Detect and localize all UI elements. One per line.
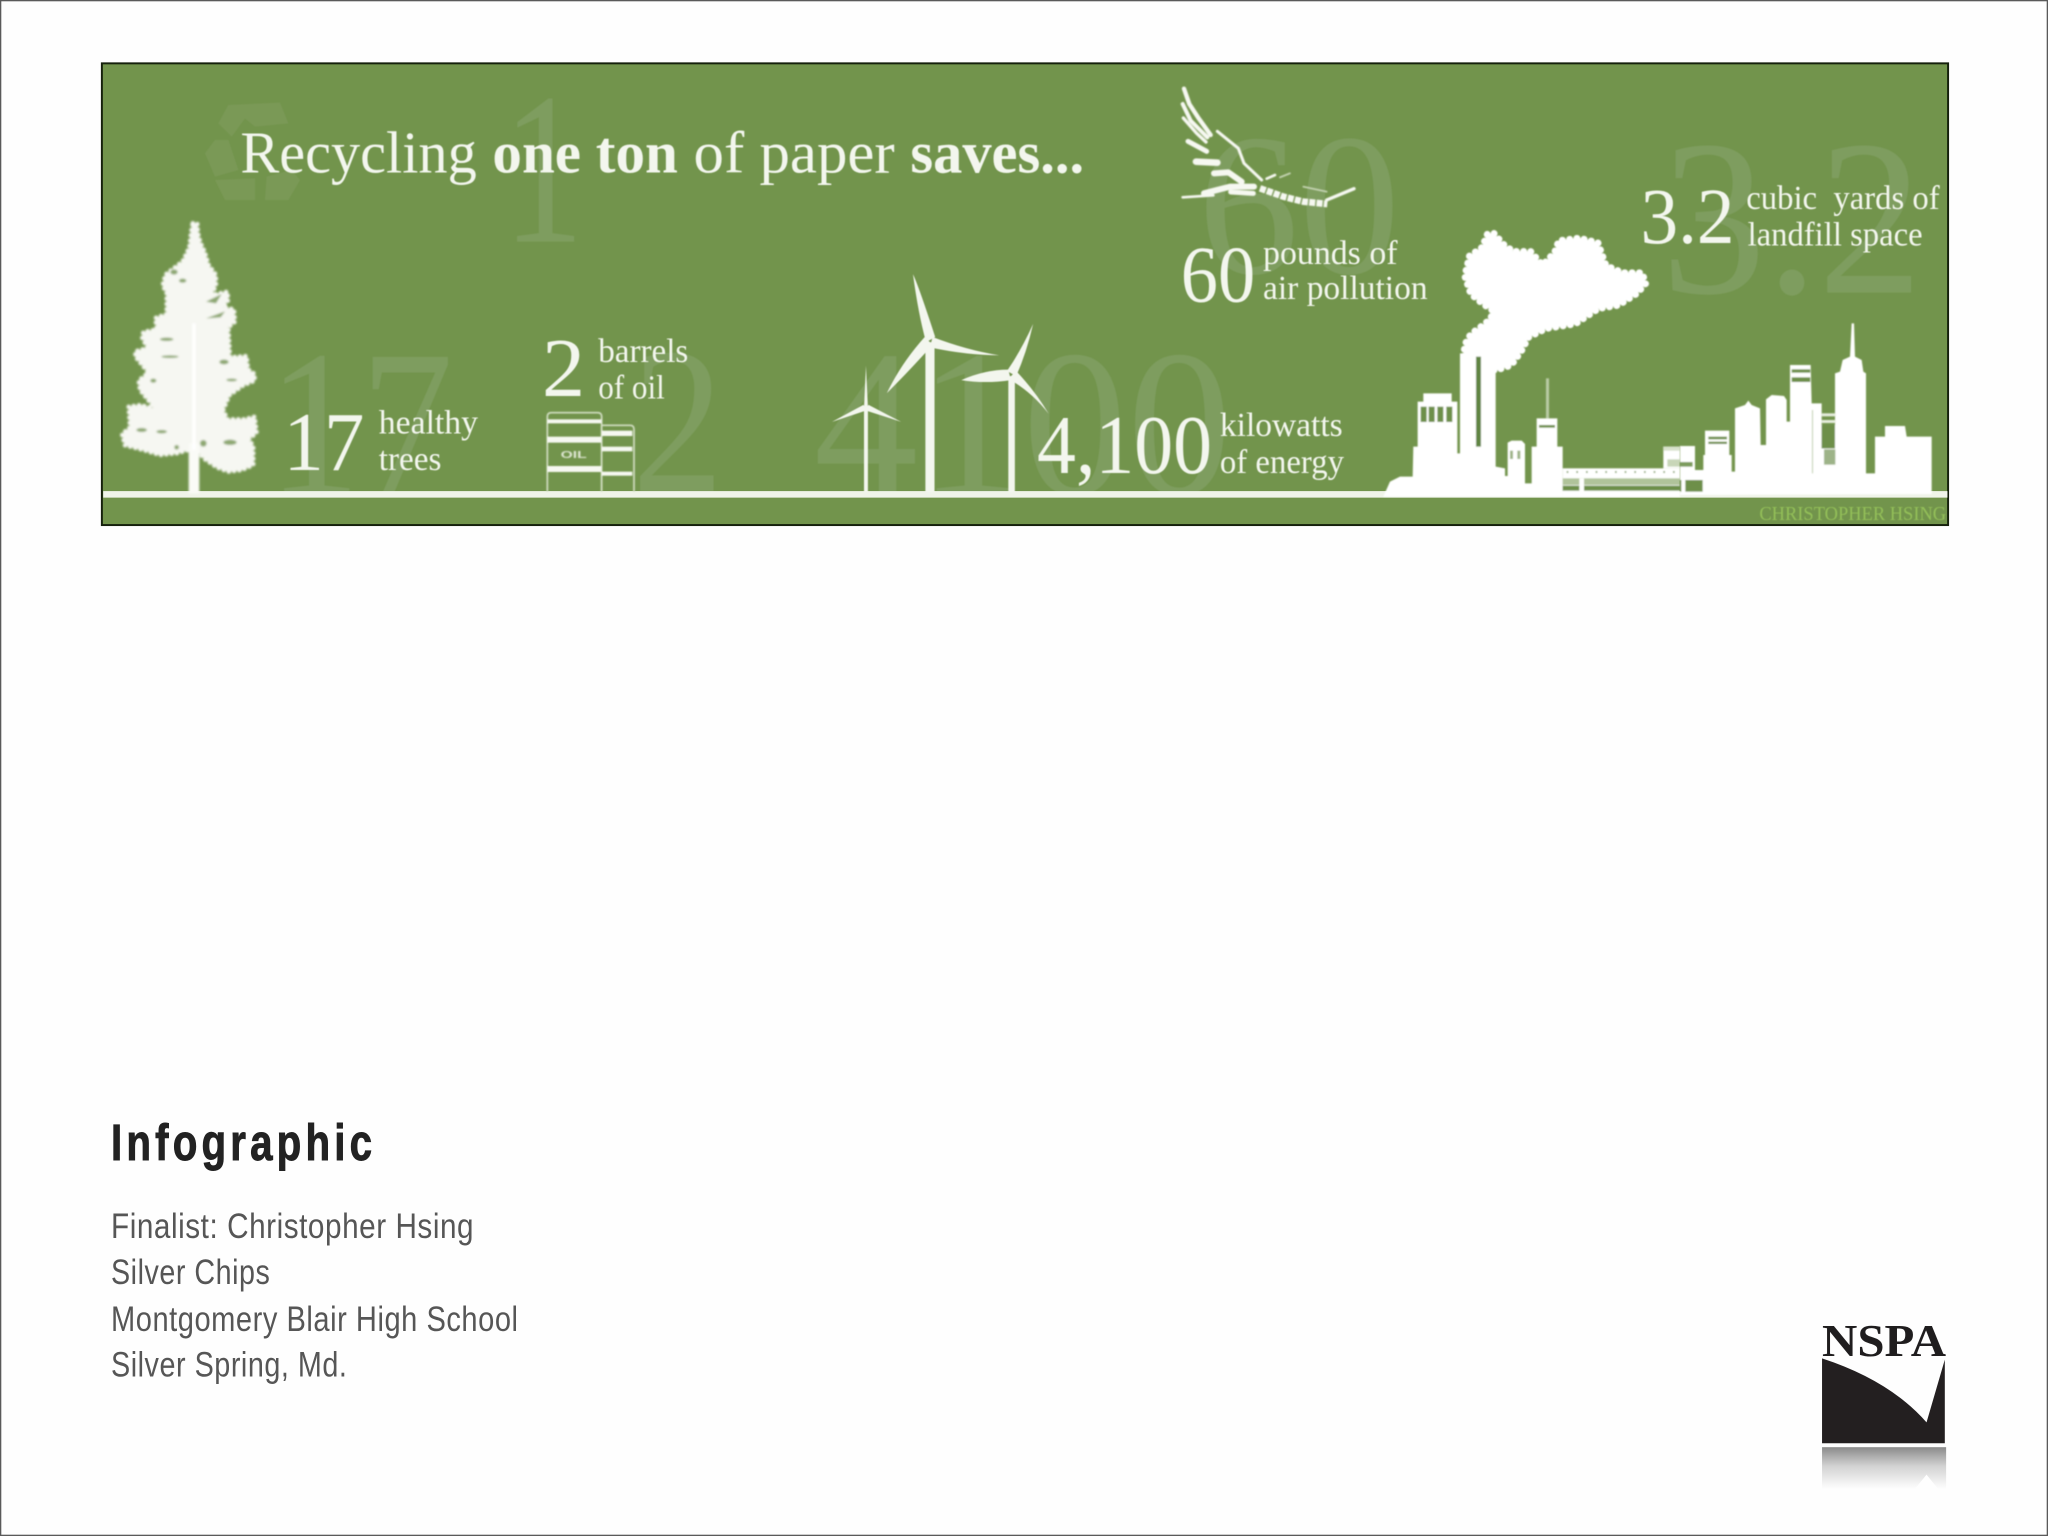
ghost numerals — [268, 49, 1923, 540]
ghost numerals: 60 — [1198, 93, 1400, 317]
icon: oil barrels: OIL — [561, 450, 587, 461]
title: Recycling — [240, 120, 477, 185]
text block: credits: Finalist: Christopher Hsing — [111, 1207, 474, 1246]
stat: 17 healthy trees: trees — [379, 441, 441, 478]
stat: 17 healthy trees — [283, 397, 478, 489]
title: saves... — [910, 120, 1084, 185]
stat: 60 pounds of air pollution: air pollution — [1263, 270, 1428, 307]
stat: 2 barrels of oil: of oil — [598, 369, 665, 406]
panel: recycling infographic — [102, 49, 1948, 540]
title: of paper — [694, 120, 895, 185]
stat: 4,100 kilowatts of energy: kilowatts — [1220, 407, 1343, 444]
ghost numerals: 3.2 — [1661, 96, 1923, 342]
icon: bird — [1183, 89, 1354, 204]
stat: 60 pounds of air pollution: 60 — [1181, 230, 1255, 320]
credit: CHRISTOPHER HSING — [1759, 504, 1946, 525]
text block: credits: Silver Spring, Md. — [111, 1346, 347, 1385]
icon: factory and smoke cloud — [1383, 233, 1680, 497]
ghost numerals: 17 — [268, 309, 453, 540]
text block: credits — [111, 1207, 519, 1385]
icon: oil barrels — [547, 413, 634, 492]
factory windows — [1421, 407, 1555, 459]
ghost numerals: 2 — [632, 306, 724, 537]
stat: 3.2 cubic yards of landfill space: 3.2 — [1640, 173, 1735, 261]
ground line — [103, 491, 1947, 498]
logo: NSPA — [1822, 1315, 1946, 1489]
stat: 4,100 kilowatts of energy: of energy — [1220, 444, 1344, 481]
logo: NSPA: NSPA — [1822, 1315, 1946, 1366]
stat: 17 healthy trees: 17 — [283, 397, 364, 489]
stat: 60 pounds of air pollution — [1181, 230, 1428, 320]
title — [240, 120, 1084, 185]
stat: 4,100 kilowatts of energy: 4,100 — [1037, 400, 1212, 492]
icon: tree — [122, 223, 257, 493]
ghost numerals: 1 — [503, 49, 584, 289]
icon: city skyline — [1680, 323, 1932, 495]
skyline windows — [1680, 369, 1810, 492]
stat: 2 barrels of oil: barrels — [598, 333, 688, 370]
text block: credits: Montgomery Blair High School — [111, 1300, 519, 1339]
title: one ton — [492, 120, 678, 185]
stat: 2 barrels of oil — [542, 323, 688, 415]
text block: credits: Silver Chips — [111, 1253, 270, 1292]
tree gaps — [136, 269, 237, 450]
icon: wind turbines — [832, 274, 1049, 492]
heading: Infographic — [111, 1114, 376, 1171]
stat: 3.2 cubic yards of landfill space: cubic yards of — [1746, 180, 1940, 217]
stat: 2 barrels of oil: 2 — [542, 323, 585, 415]
stat: 17 healthy trees: healthy — [379, 405, 478, 442]
stat: 60 pounds of air pollution: pounds of — [1263, 235, 1398, 272]
bridge — [1563, 468, 1680, 497]
stat: 3.2 cubic yards of landfill space — [1640, 173, 1940, 261]
stat: 4,100 kilowatts of energy — [1037, 400, 1344, 492]
ghost numerals: 4100 — [814, 309, 1232, 540]
stat: 3.2 cubic yards of landfill space: landfill space — [1748, 217, 1923, 254]
icon: ghost recycling symbol — [205, 103, 300, 200]
